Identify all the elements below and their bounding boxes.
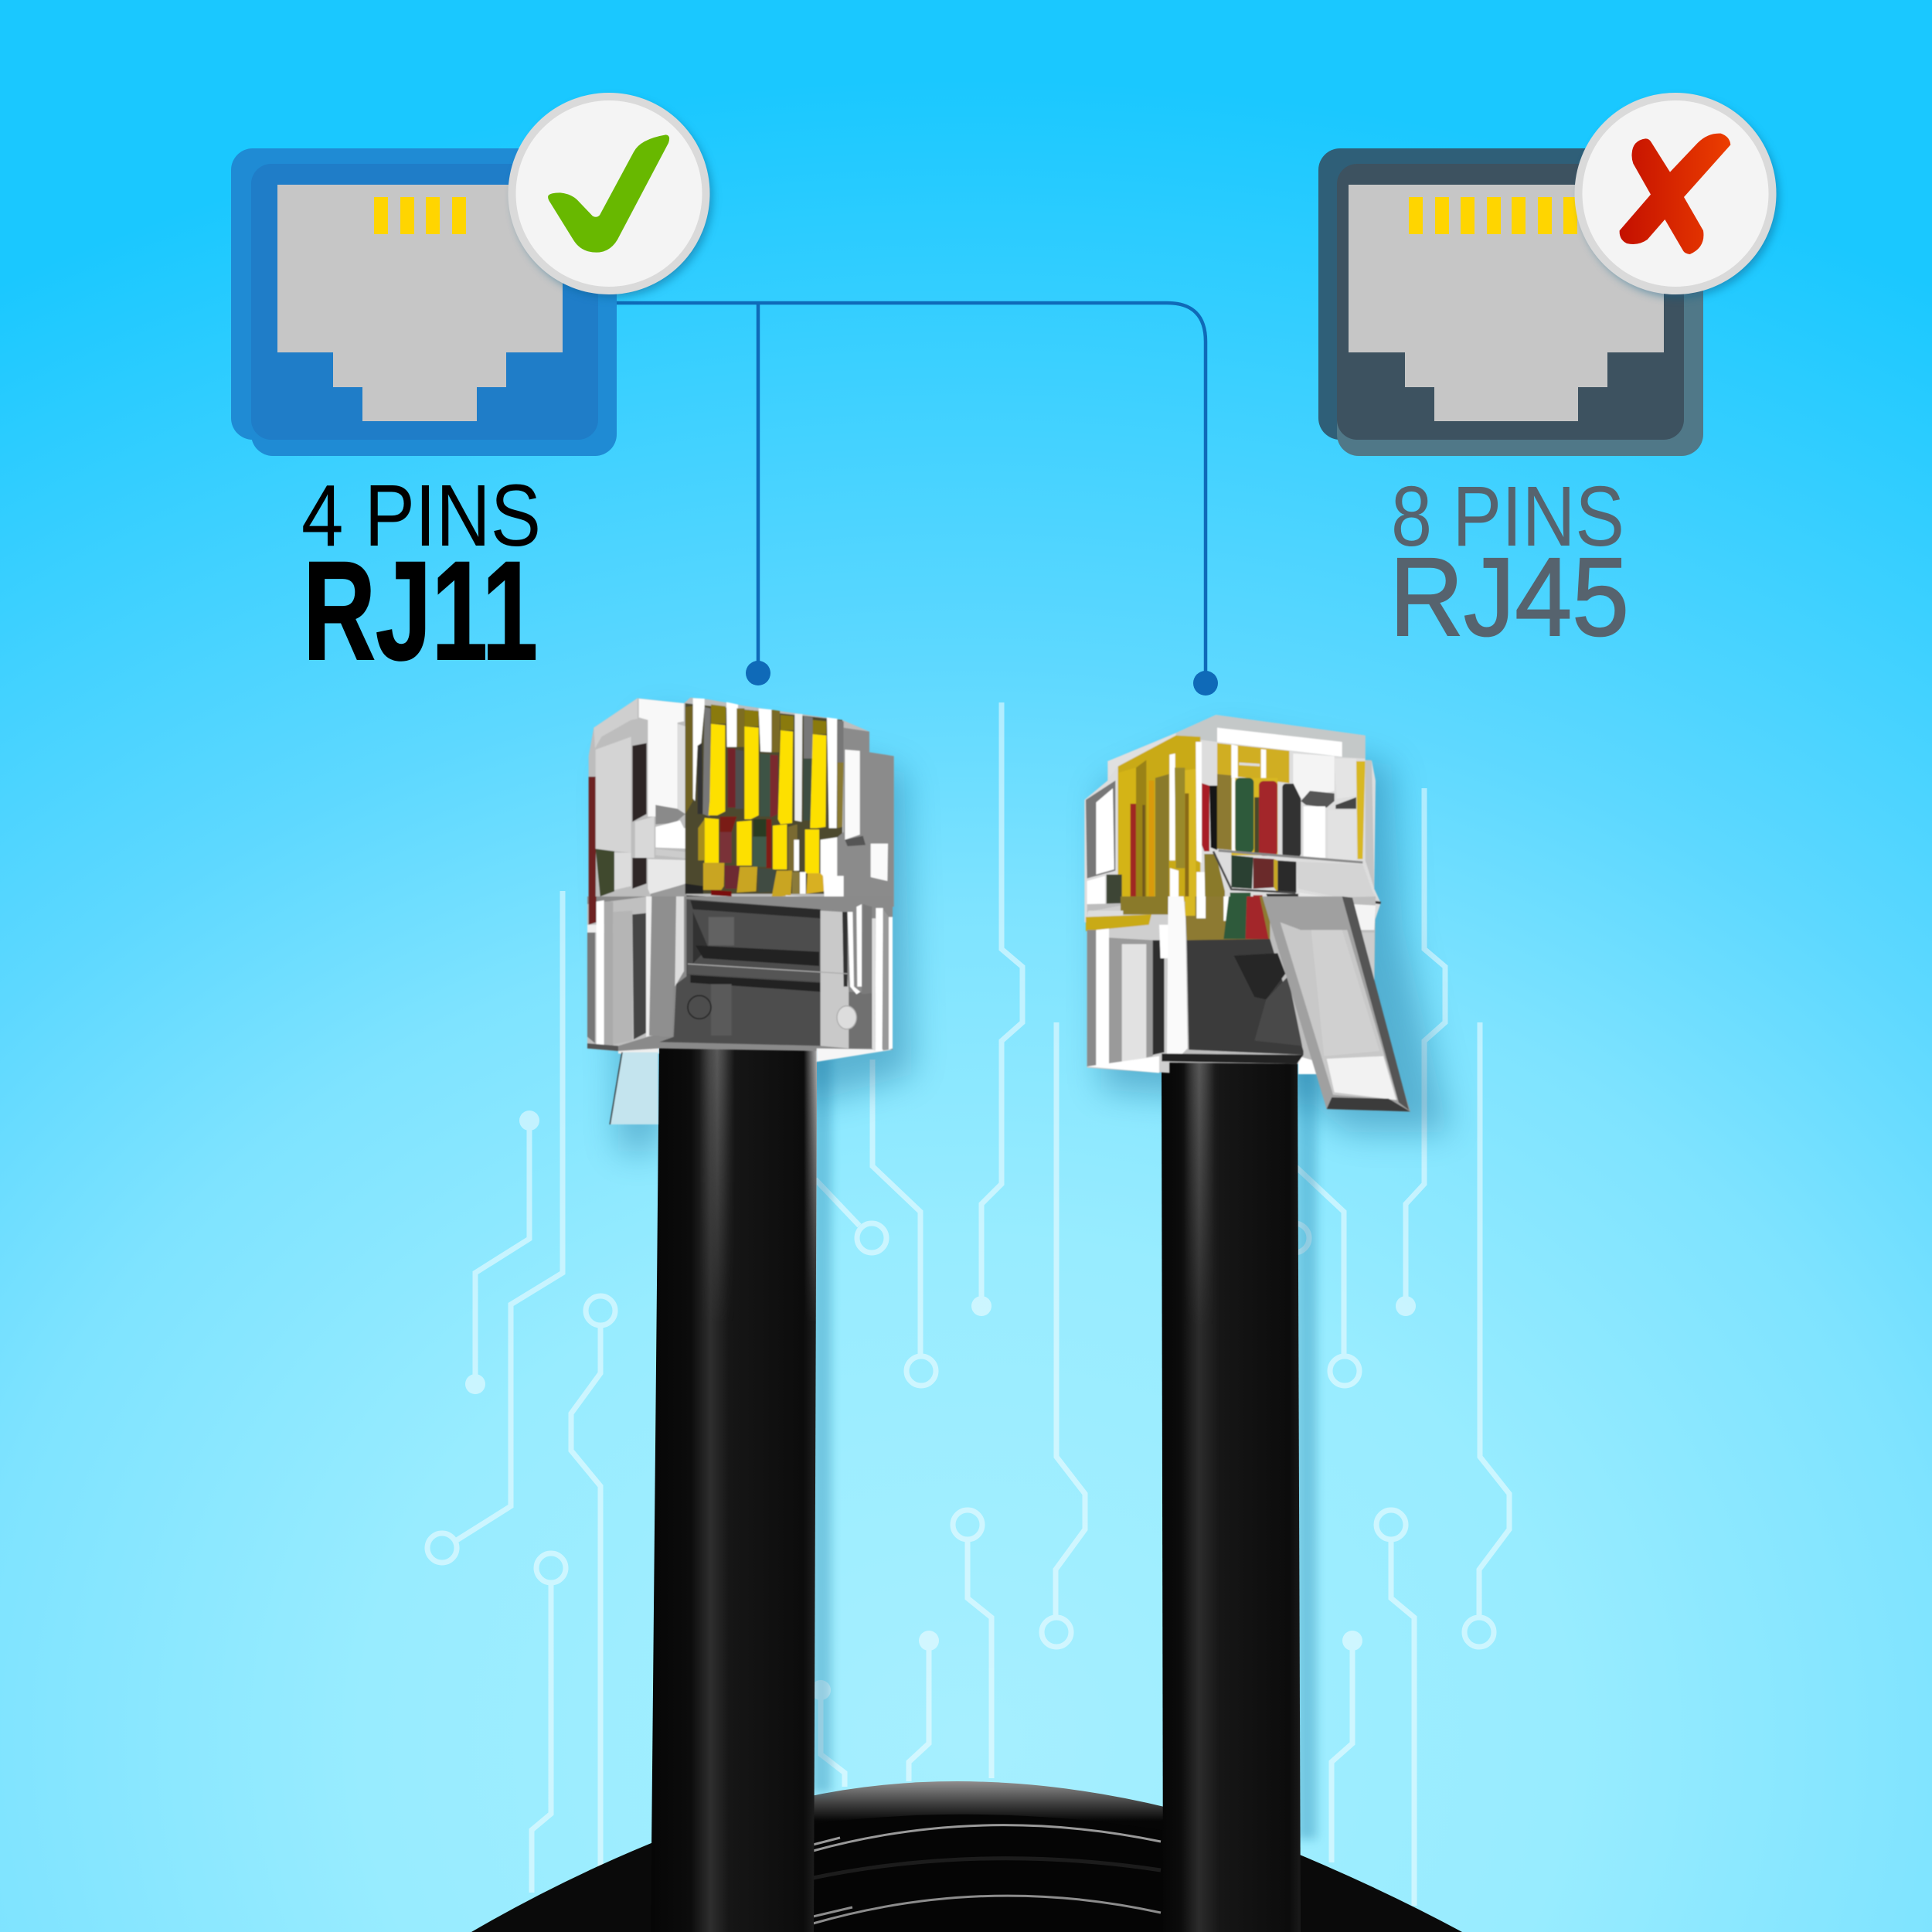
trace: ring F xyxy=(872,1060,936,1386)
plug upper body xyxy=(1084,715,1381,922)
trace: ring E xyxy=(815,1179,886,1253)
plug lower body xyxy=(1086,896,1410,1111)
trace: dot G xyxy=(971,702,1022,1316)
left cable xyxy=(651,1043,817,1932)
trace: right dot J xyxy=(1332,1631,1362,1862)
port backing xyxy=(1318,148,1703,456)
cross badge xyxy=(1578,97,1778,297)
plug upper body xyxy=(589,698,894,906)
label: 8 PINS RJ45: RJ45 xyxy=(1389,535,1629,659)
trace: dot J xyxy=(909,1631,939,1781)
cable shadows xyxy=(811,1051,1317,1839)
coiled cable xyxy=(471,1781,1462,1932)
trace: right ring H xyxy=(1464,1022,1509,1647)
trace: ring H xyxy=(1042,1022,1085,1647)
label: 8 PINS RJ45 xyxy=(1389,469,1629,659)
trace: left dot A xyxy=(465,1111,539,1394)
label: 8 PINS RJ45: 8 PINS xyxy=(1391,469,1624,564)
label: 4 PINS RJ11 xyxy=(301,467,541,689)
trace: left ring B xyxy=(427,891,563,1563)
check badge xyxy=(512,97,712,297)
trace: dot K xyxy=(811,1680,845,1787)
trace: right ring E xyxy=(1280,1166,1359,1386)
port socket xyxy=(277,185,563,421)
dot: RJ11 pointer xyxy=(746,661,770,685)
icon: red cross xyxy=(1620,134,1730,254)
label: 4 PINS RJ11: 4 PINS xyxy=(301,467,541,564)
gold pins xyxy=(1409,197,1577,234)
gold pins xyxy=(374,197,466,234)
dot: RJ45 pointer xyxy=(1193,671,1218,696)
trace: right dot G xyxy=(1396,788,1445,1316)
trace: right ring I xyxy=(1376,1510,1414,1906)
port backing xyxy=(231,148,617,456)
connector shadows xyxy=(611,715,1449,1151)
icon: green check xyxy=(548,134,669,253)
connector: RJ11 plug xyxy=(587,698,894,1124)
trace: ring I xyxy=(953,1510,992,1778)
plug lower body xyxy=(587,896,893,1124)
right cable xyxy=(1162,1061,1301,1932)
port socket xyxy=(1349,185,1664,421)
connector: RJ45 plug xyxy=(1084,715,1410,1111)
trace: left ring C xyxy=(571,1296,615,1870)
panel: RJ11 port icon xyxy=(231,97,712,456)
label: 4 PINS RJ11: RJ11 xyxy=(303,532,538,689)
circuit trace pattern xyxy=(427,702,1509,1906)
connector line from RJ11 icon xyxy=(617,303,1206,683)
trace: left ring D xyxy=(532,1553,566,1893)
panel: RJ45 port icon xyxy=(1318,97,1778,456)
